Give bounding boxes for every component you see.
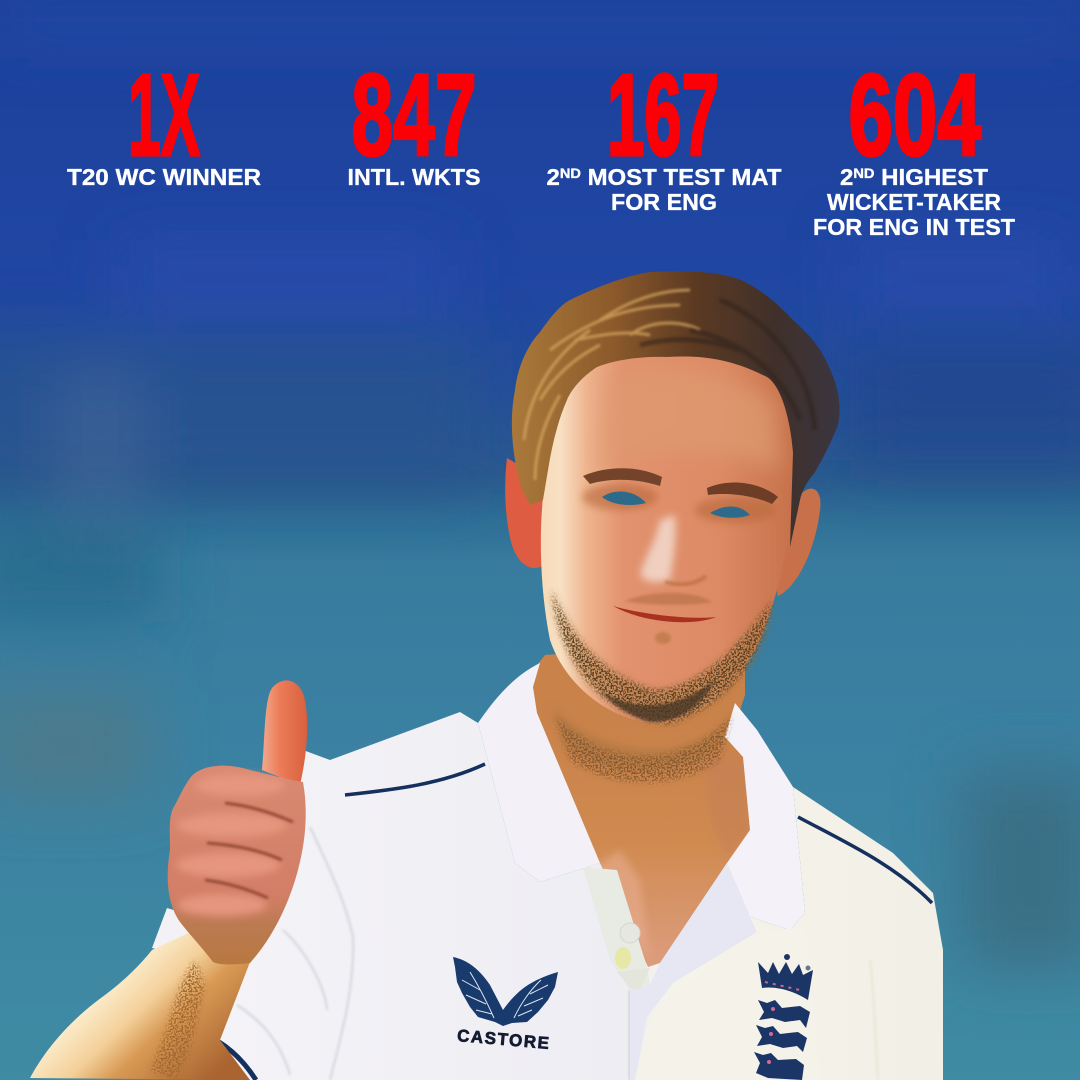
neck stubble bbox=[555, 715, 732, 782]
stat: 604 test wickets: ND bbox=[853, 165, 875, 181]
stat: 604 test wickets bbox=[813, 50, 1015, 240]
forearm bbox=[30, 930, 250, 1080]
neck shading bbox=[705, 757, 750, 857]
shirt placket bbox=[583, 867, 650, 990]
right ear bbox=[770, 489, 820, 596]
hand with thumbs up bbox=[168, 680, 307, 964]
player photo illustration bbox=[30, 271, 943, 1080]
thumb bbox=[262, 680, 307, 785]
right eye bbox=[710, 506, 750, 518]
stat: 604 test wickets: HIGHEST bbox=[875, 164, 988, 190]
finger creases bbox=[205, 803, 293, 898]
stat: 604 test wickets: WICKET-TAKER bbox=[827, 189, 1001, 215]
stat: 167 test matches: 2 bbox=[546, 164, 559, 190]
left collar bbox=[478, 663, 600, 882]
stat: 847 international wickets: INTL. WKTS bbox=[348, 164, 480, 190]
stat: 167 test matches: FOR ENG bbox=[611, 189, 717, 215]
stat: 604 test wickets: 2 bbox=[840, 164, 853, 190]
mouth bbox=[613, 606, 716, 622]
right collar bbox=[725, 703, 805, 930]
shirt folds bbox=[237, 827, 878, 1080]
button bbox=[615, 923, 650, 990]
stat: 167 test matches: MOST TEST MAT bbox=[581, 164, 782, 190]
eye socket shadows bbox=[582, 484, 775, 523]
forehead tone bbox=[600, 368, 780, 470]
chin dimple bbox=[655, 632, 671, 644]
stats row bbox=[67, 50, 1015, 240]
fist bbox=[168, 766, 306, 964]
stat: 167 test matches: 167 bbox=[607, 50, 719, 180]
moustache bbox=[625, 593, 712, 605]
shirt body bbox=[218, 712, 943, 1080]
left ear bbox=[505, 458, 545, 568]
face bbox=[541, 342, 800, 724]
stat: 1X T20 WC winner: T20 WC WINNER bbox=[67, 164, 261, 190]
sleeve and shoulder trims bbox=[219, 764, 932, 1080]
logo: Castore bbox=[453, 957, 558, 1053]
forearm hair bbox=[150, 960, 205, 1080]
castore wings mark bbox=[453, 957, 558, 1026]
small sleeve edge behind wrist bbox=[152, 908, 200, 960]
stat: 1X T20 WC winner bbox=[67, 50, 261, 190]
finger highlights bbox=[176, 774, 287, 916]
stat: 1X T20 WC winner: 1X bbox=[128, 50, 200, 180]
right brow bbox=[707, 482, 778, 504]
castore wordmark: CASTORE bbox=[456, 1026, 550, 1053]
stat: 604 test wickets: FOR ENG IN TEST bbox=[813, 214, 1015, 240]
nose bbox=[640, 515, 706, 584]
hair dark strands bbox=[640, 300, 815, 430]
hair bbox=[512, 271, 840, 547]
logo: England crest bbox=[754, 954, 813, 1080]
stat: 167 test matches bbox=[546, 50, 782, 215]
cheek stubble and beard bbox=[552, 590, 772, 724]
left eye bbox=[602, 491, 646, 505]
stat: 847 international wickets bbox=[348, 50, 480, 190]
three lions bbox=[754, 1000, 810, 1080]
neck bbox=[525, 640, 765, 975]
stat: 847 international wickets: 847 bbox=[352, 50, 476, 180]
hair highlights bbox=[524, 290, 700, 480]
left brow bbox=[583, 468, 662, 486]
head and face bbox=[505, 271, 840, 782]
stat: 604 test wickets: 604 bbox=[848, 50, 982, 180]
stat: 167 test matches: ND bbox=[560, 165, 581, 181]
crown bbox=[758, 954, 813, 1000]
